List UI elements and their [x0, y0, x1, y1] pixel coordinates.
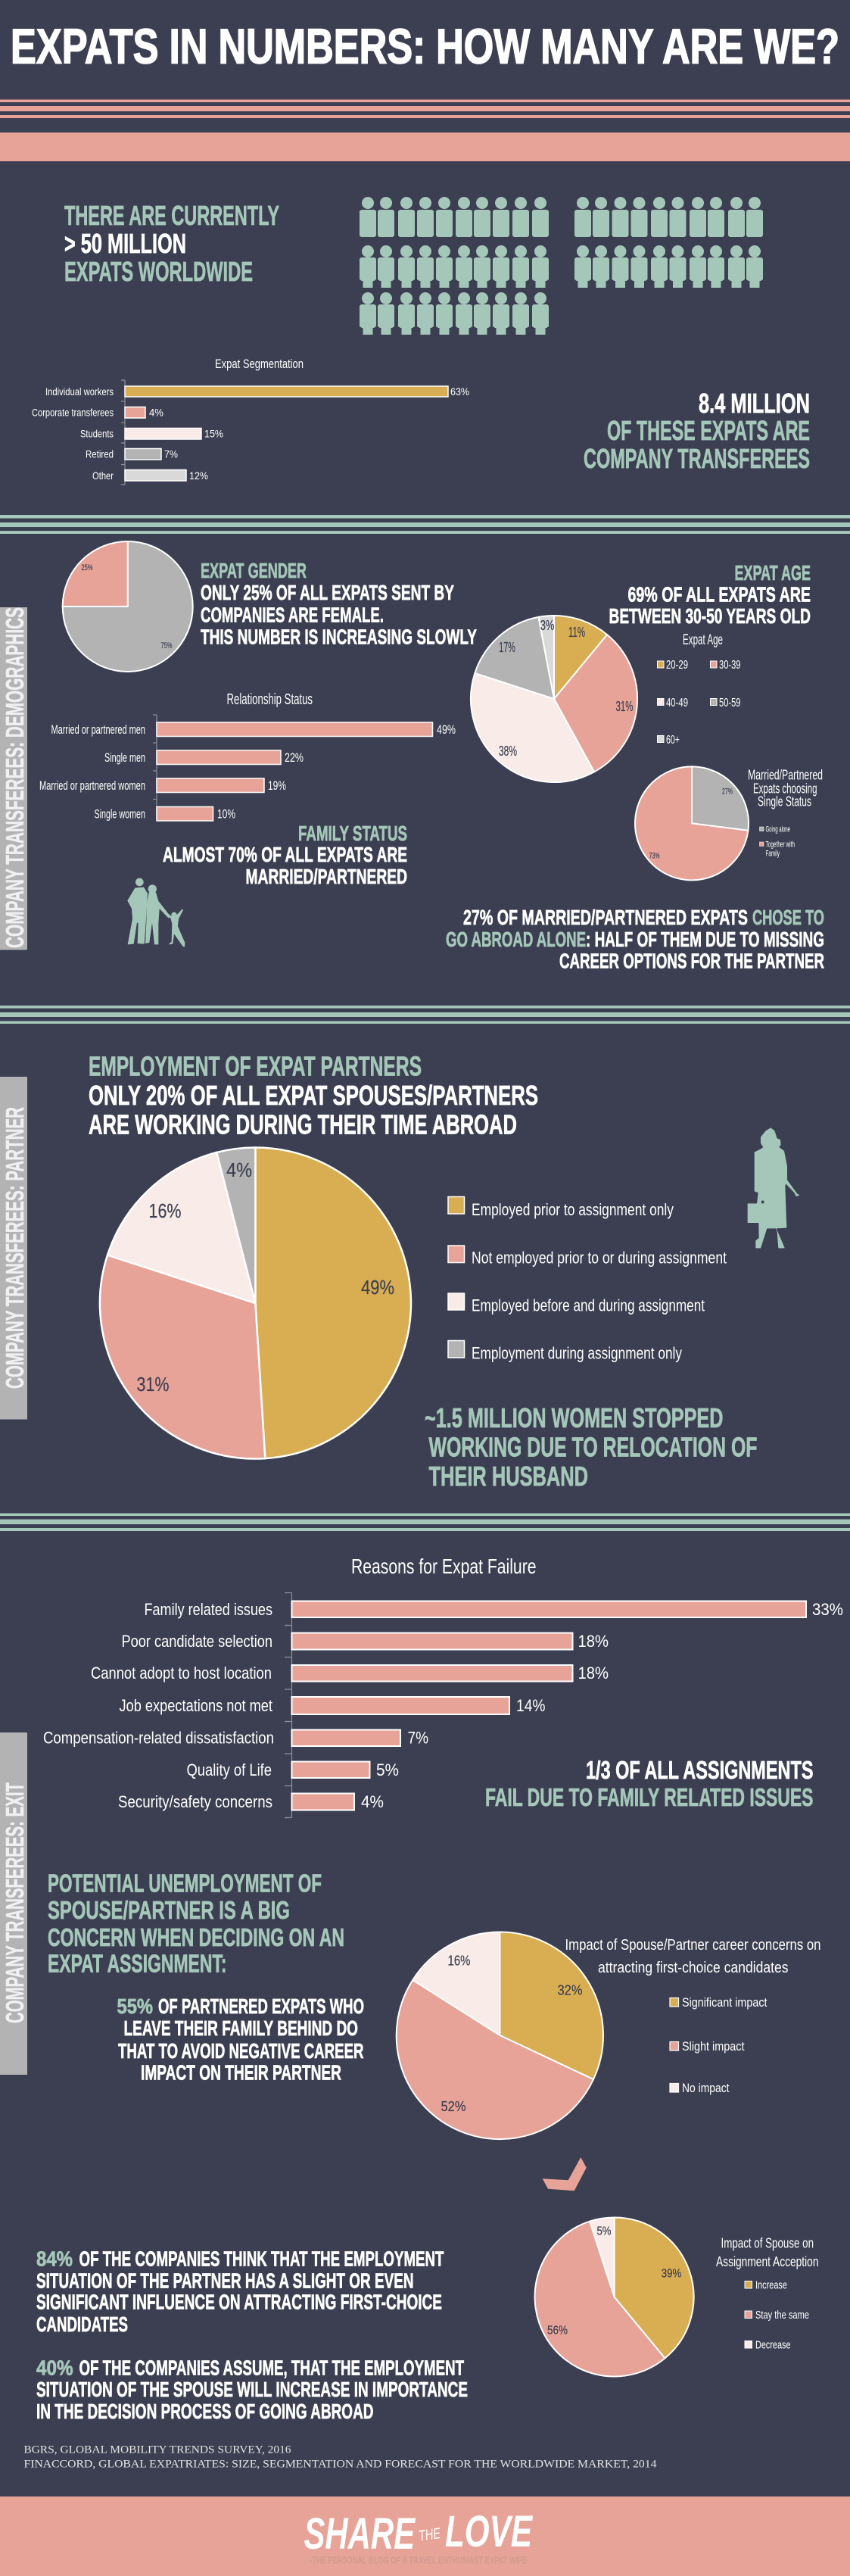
text: 55% of partnered expats [117, 1994, 364, 2084]
legend: partner employment: Not employed prior to or during assignment [472, 1248, 727, 1268]
bar chart: reasons for expat failure: 4% [361, 1792, 384, 1811]
bar chart: expat segmentation: 63% [450, 385, 469, 398]
text: 50 million expats worldwide: THERE ARE CURRENTLY [64, 200, 279, 231]
text: 84% of companies: SIGNIFICANT INFLUENCE ON ATTRACTING FIRST-CHOICE [36, 2290, 442, 2314]
text: 55% of partnered expats: OF PARTNERED EXPATS WHO [158, 1994, 364, 2018]
pie chart: expat age [471, 616, 637, 782]
text: potential unemployment [48, 1869, 344, 1978]
bar chart: relationship status: 49% [437, 722, 456, 737]
text: 40% of companies [36, 2356, 468, 2423]
text: employment of expat partners: ONLY 20% OF ALL EXPAT SPOUSES/PARTNERS [89, 1080, 538, 1111]
icon: family silhouette [127, 878, 185, 947]
text: 84% of companies [36, 2247, 444, 2336]
text: employment of expat partners [89, 1051, 538, 1140]
bar chart: expat segmentation: Other [92, 469, 114, 482]
bar chart: reasons for expat failure: 33% [812, 1600, 843, 1619]
legend: single status [748, 768, 823, 859]
text: expat gender: EXPAT GENDER [201, 559, 307, 582]
bar chart: relationship status [39, 691, 456, 821]
text: expat gender: COMPANIES ARE FEMALE. [201, 603, 384, 627]
text: 27% chose to go abroad alone [446, 906, 824, 972]
text: employment of expat partners: EMPLOYMENT OF EXPAT PARTNERS [89, 1051, 422, 1081]
legend: spouse impact: Decrease [755, 2338, 790, 2352]
side tab: exit: COMPANY TRANSFEREES: EXIT [1, 1782, 29, 2023]
bar chart: reasons for expat failure: 14% [516, 1696, 545, 1715]
text: family status: FAMILY STATUS [298, 822, 407, 845]
legend: career concern impact: Slight impact [682, 2039, 745, 2054]
text: expat gender [201, 559, 477, 648]
pie chart: expat gender: 75% [160, 641, 173, 650]
text: 8.4 million transferees [584, 388, 810, 474]
pie chart: partner employment: 49% [361, 1276, 394, 1299]
legend: expat age: 60+ [666, 734, 680, 747]
pie chart: single status: 73% [649, 851, 660, 860]
side tab: partner: COMPANY TRANSFEREES: PARTNER [1, 1107, 29, 1389]
footer logo [304, 2507, 534, 2559]
text: family status [163, 822, 407, 888]
pie chart: expat age: 31% [616, 699, 633, 714]
legend: expat age [657, 632, 741, 747]
text: 84% of companies: SITUATION OF THE PARTNER HAS A SLIGHT OR EVEN [36, 2269, 413, 2293]
icon: businesswoman silhouette [748, 1127, 800, 1248]
bar chart: relationship status: Married or partnered women [39, 778, 145, 793]
bar chart: expat segmentation: 4% [149, 406, 163, 418]
legend: spouse impact: Impact of Spouse on [721, 2235, 814, 2250]
text: sources: FINACCORD, GLOBAL EXPATRIATES: SIZE, SEGMENTATION AND FORECAST FOR THE WORLDWIDE MARKET, 2014 [24, 2458, 657, 2470]
pie chart: partner employment: 16% [148, 1199, 182, 1222]
legend: career concern impact [565, 1937, 820, 2095]
legend: partner employment [448, 1196, 727, 1363]
pie chart: career concern impact: 52% [441, 2099, 466, 2114]
footer band [0, 2496, 850, 2576]
legend: spouse impact: Stay the same [755, 2309, 809, 2322]
bar chart: expat segmentation: Retired [86, 448, 114, 460]
pink banner [0, 133, 850, 161]
bar chart: expat segmentation: Expat Segmentation [215, 357, 304, 371]
icon grid: people pictogram [360, 197, 763, 335]
legend: single status: Single Status [758, 794, 811, 809]
pie chart: career concern impact: 16% [448, 1954, 471, 1969]
text: 50 million expats worldwide [64, 200, 279, 287]
bar chart: reasons for expat failure: Reasons for Expat Failure [351, 1555, 536, 1578]
legend: expat age: 50-59 [719, 697, 741, 709]
bar chart: relationship status: Relationship Status [227, 691, 313, 708]
text: 27% chose to go abroad alone: GO ABROAD ALONE [446, 928, 586, 951]
legend: partner employment: Employed prior to assignment only [472, 1200, 674, 1219]
text: 1.5 million women stopped working: THEIR HUSBAND [428, 1461, 588, 1492]
legend: partner employment: Employment during assignment only [472, 1343, 682, 1363]
text: potential unemployment: SPOUSE/PARTNER IS A BIG [48, 1896, 290, 1924]
text: 55% of partnered expats: LEAVE THEIR FAMILY BEHIND DO [124, 2016, 358, 2040]
bar chart: reasons for expat failure: 7% [407, 1728, 428, 1748]
text: 1.5 million women stopped working: ~1.5 MILLION WOMEN STOPPED [425, 1402, 724, 1433]
text: potential unemployment: EXPAT ASSIGNMENT: [48, 1949, 227, 1978]
bar chart: reasons for expat failure [43, 1555, 843, 1817]
bar chart: relationship status: Single women [94, 807, 145, 821]
bar chart: expat segmentation: 12% [189, 469, 208, 482]
bar chart: reasons for expat failure: Family related issues [144, 1600, 272, 1619]
text: sources: BGRS, GLOBAL MOBILITY TRENDS SURVEY, 2016 [24, 2444, 291, 2456]
arrow: chevron down [543, 2157, 587, 2191]
legend: career concern impact: attracting first-choice candidates [598, 1960, 789, 1976]
legend: spouse impact [716, 2235, 819, 2352]
side tab: demographics: COMPANY TRANSFEREES: DEMOGRAPHICS [1, 607, 29, 948]
pie chart: spouse impact: 5% [596, 2225, 612, 2238]
legend: spouse impact: Increase [755, 2279, 787, 2291]
legend: expat age: Expat Age [683, 632, 723, 648]
text: 40% of companies: IN THE DECISION PROCESS OF GOING ABROAD [36, 2400, 374, 2423]
text: 84% of companies: 84% [36, 2247, 73, 2270]
legend: expat age: 40-49 [666, 697, 688, 709]
pie chart: expat age: 11% [568, 625, 585, 640]
text: 55% of partnered expats: 55% [117, 1994, 153, 2018]
bar chart: expat segmentation: Students [80, 427, 114, 439]
text: 40% of companies: SITUATION OF THE SPOUSE WILL INCREASE IN IMPORTANCE [36, 2378, 468, 2401]
bar chart: expat segmentation: 15% [204, 427, 223, 439]
bar chart: relationship status: Single men [104, 750, 145, 765]
text: sources [24, 2444, 657, 2470]
text: 55% of partnered expats: THAT TO AVOID NEGATIVE CAREER [118, 2039, 363, 2063]
footer logo: LOVE [445, 2507, 534, 2556]
pie chart: partner employment [100, 1147, 411, 1459]
bar chart: reasons for expat failure: Compensation-related dissatisfaction [43, 1728, 274, 1748]
text: 84% of companies: CANDIDATES [36, 2312, 128, 2336]
bar chart: expat segmentation: 7% [164, 448, 178, 460]
bar chart: reasons for expat failure: Job expectations not met [120, 1696, 272, 1715]
bar chart: reasons for expat failure: Quality of Life [186, 1760, 272, 1779]
legend: expat age: 30-39 [719, 659, 741, 672]
text: 40% of companies: OF THE COMPANIES ASSUME, THAT THE EMPLOYMENT [79, 2356, 464, 2379]
text: employment of expat partners: ARE WORKING DURING THEIR TIME ABROAD [89, 1109, 517, 1140]
side tab: exit [0, 1732, 29, 2075]
bar chart: expat segmentation: Corporate transferees [32, 406, 114, 418]
pie chart: expat age: 17% [499, 640, 515, 655]
text: one third fail [485, 1756, 813, 1811]
footer logo: SHARE [304, 2509, 416, 2559]
text: family status: ALMOST 70% OF ALL EXPATS ARE [163, 843, 407, 866]
bar chart: expat segmentation [32, 357, 469, 485]
pie chart: spouse impact: 56% [547, 2325, 568, 2337]
legend: spouse impact: Assignment Acception [716, 2254, 819, 2269]
pie chart: single status [635, 766, 749, 880]
pie chart: partner employment: 4% [226, 1159, 252, 1181]
text: expat gender: ONLY 25% OF ALL EXPATS SENT BY [201, 581, 454, 604]
footer tagline: -THE PERSONAL BLOG OF A TRAVEL ENTHUSIAST EXPAT WIFE- [310, 2555, 529, 2565]
text: family status: MARRIED/PARTNERED [245, 865, 407, 888]
bar chart: reasons for expat failure: Cannot adopt to host location [91, 1664, 272, 1683]
side tab: demographics [0, 607, 29, 950]
bar chart: reasons for expat failure: 5% [376, 1760, 399, 1779]
bar chart: relationship status: 22% [285, 750, 304, 765]
bar chart: relationship status: 10% [217, 807, 235, 821]
text: potential unemployment: POTENTIAL UNEMPLOYMENT OF [48, 1869, 322, 1898]
pie chart: expat age: 38% [499, 744, 517, 759]
pie chart: career concern impact [397, 1932, 603, 2139]
footer logo: THE [418, 2525, 442, 2545]
text: 40% of companies: 40% [36, 2356, 73, 2379]
bar chart: reasons for expat failure: 18% [578, 1632, 609, 1651]
bar chart: reasons for expat failure: 18% [578, 1664, 609, 1683]
bar chart: reasons for expat failure: Security/safety concerns [118, 1792, 272, 1811]
bar chart: relationship status: Married or partnered men [51, 722, 145, 737]
legend: single status: Together with [766, 840, 795, 850]
bar chart: relationship status: 19% [268, 778, 286, 793]
pie chart: spouse impact [535, 2217, 694, 2376]
text: 55% of partnered expats: IMPACT ON THEIR PARTNER [141, 2061, 341, 2084]
text: potential unemployment: CONCERN WHEN DECIDING ON AN [48, 1923, 344, 1951]
pie chart: expat gender [63, 541, 193, 672]
legend: partner employment: Employed before and during assignment [472, 1296, 705, 1315]
legend: expat age: 20-29 [666, 659, 688, 672]
legend: career concern impact: No impact [682, 2081, 730, 2095]
side tab: partner [0, 1077, 29, 1419]
legend: single status: Family [766, 850, 780, 859]
legend: career concern impact: Significant impact [682, 1995, 767, 2010]
pie chart: partner employment: 31% [136, 1373, 170, 1396]
text: 50 million expats worldwide: > 50 MILLION [64, 228, 186, 259]
pie chart: career concern impact: 32% [557, 1982, 583, 1997]
text: 84% of companies: OF THE COMPANIES THINK THAT THE EMPLOYMENT [79, 2247, 444, 2270]
text: 1.5 million women stopped working [425, 1402, 757, 1492]
pie chart: single status: 27% [722, 787, 733, 797]
text: expat gender: THIS NUMBER IS INCREASING SLOWLY [201, 625, 477, 648]
pie chart: expat gender: 25% [82, 563, 93, 572]
text: expat age [609, 561, 811, 628]
legend: single status: Going alone [766, 825, 790, 834]
pie chart: spouse impact: 39% [662, 2267, 681, 2281]
pie chart: expat age: 3% [540, 618, 554, 633]
text: 50 million expats worldwide: EXPATS WORLDWIDE [64, 256, 253, 287]
bar chart: reasons for expat failure: Poor candidate selection [121, 1632, 272, 1651]
bar chart: expat segmentation: Individual workers [45, 385, 114, 398]
text: expat age: EXPAT AGE [734, 561, 811, 585]
